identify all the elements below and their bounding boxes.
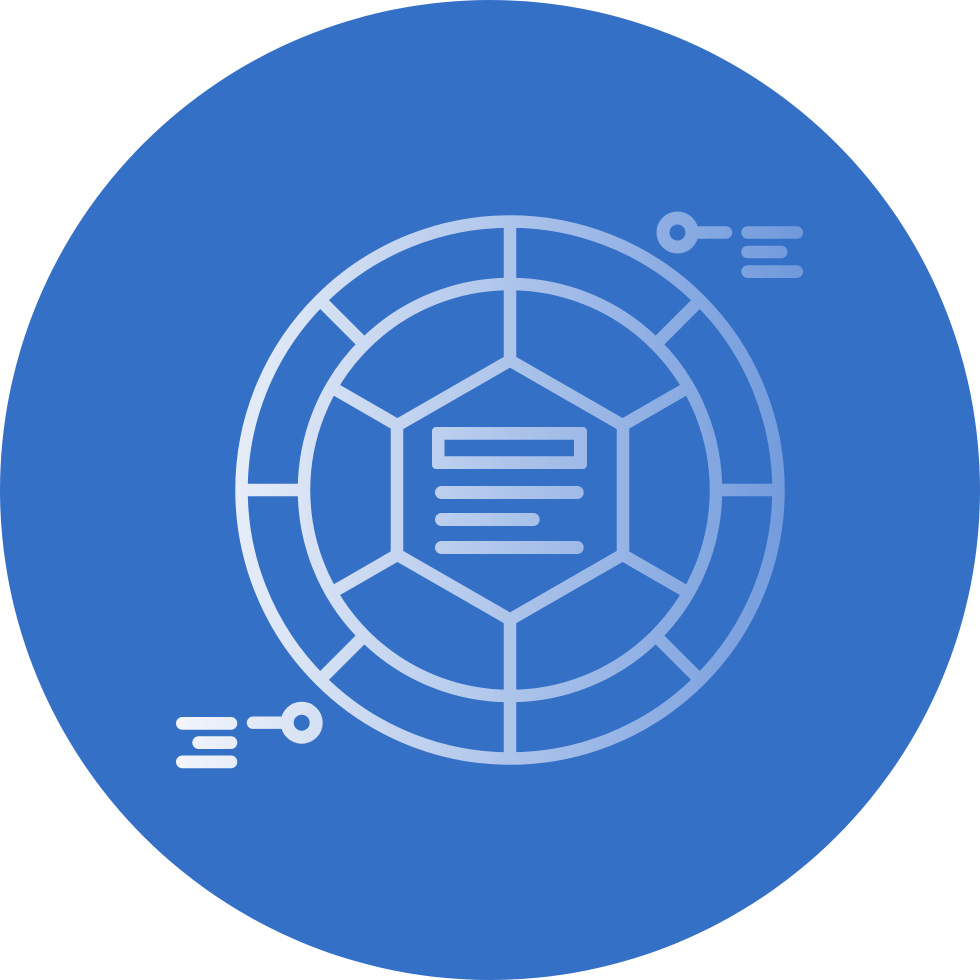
inner ring spokes: [332, 388, 688, 592]
callout marker: [287, 708, 316, 737]
outer ring: [242, 222, 778, 758]
document header box: [432, 427, 587, 469]
callout marker: [663, 218, 692, 247]
inner ring: [304, 284, 716, 696]
callout text lines: [176, 717, 237, 768]
callout connector: [696, 226, 732, 239]
document text lines: [435, 486, 584, 554]
document icon: [432, 427, 587, 554]
callout connector: [247, 716, 283, 729]
outer ring spokes: [242, 222, 778, 758]
callout: bottom left: [176, 708, 316, 768]
callout: top right: [663, 218, 803, 278]
callout text lines: [741, 226, 803, 278]
central hexagon: [397, 360, 623, 620]
wheel diagram: [242, 222, 778, 758]
